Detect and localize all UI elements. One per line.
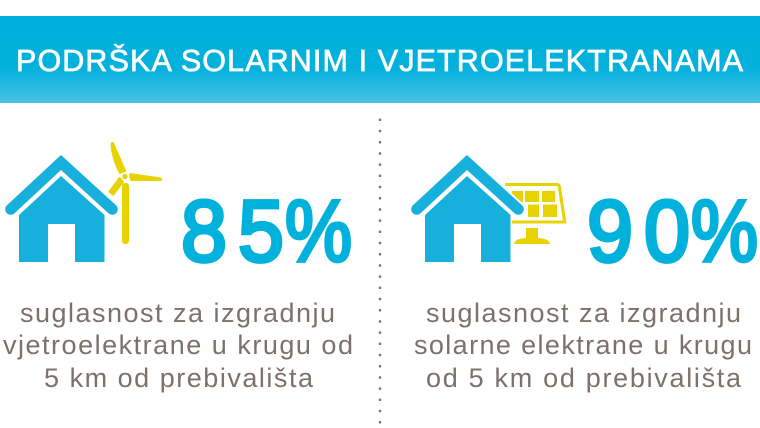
wind description text bbox=[3, 298, 353, 393]
stat: 90% bbox=[587, 183, 758, 280]
wind description text: 5 km od prebivališta bbox=[44, 363, 314, 393]
wind description text: suglasnost za izgradnju bbox=[20, 298, 335, 328]
stat: 90%: 0 bbox=[644, 183, 690, 280]
solar description text: suglasnost za izgradnju bbox=[426, 298, 741, 328]
panel: solar support bbox=[414, 162, 758, 393]
stat: 85%: % bbox=[285, 183, 352, 280]
solar description text bbox=[414, 298, 752, 393]
title banner bbox=[0, 16, 760, 103]
solar description text: solarne elektrane u krugu bbox=[414, 330, 752, 360]
stat: 85%: 5 bbox=[238, 183, 284, 280]
dotted divider bbox=[379, 120, 381, 426]
icon: house with solar panel bbox=[417, 162, 566, 262]
title: PODRŠKA SOLARNIM I VJETROELEKTRANAMA bbox=[16, 43, 744, 78]
icon: house with wind turbine bbox=[11, 142, 162, 262]
stat: 85% bbox=[181, 183, 352, 280]
stat: 90%: 9 bbox=[587, 183, 633, 280]
stat: 85%: 8 bbox=[181, 183, 227, 280]
panel: wind support bbox=[3, 142, 353, 393]
solar description text: od 5 km od prebivališta bbox=[426, 363, 742, 393]
wind description text: vjetroelektrane u krugu od bbox=[3, 330, 353, 360]
